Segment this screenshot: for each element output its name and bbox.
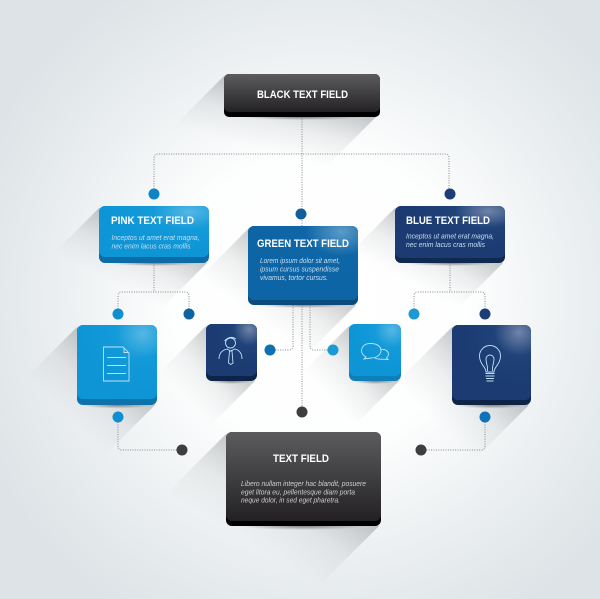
heading: green text field: GREEN TEXT FIELD [257,238,349,250]
body text: green: Lorem ipsum dolor sit amet, [260,258,340,265]
connector dots [112,188,490,456]
heading: pink text field: PINK TEXT FIELD [111,215,194,227]
panel: bottom text field: neque dolor, in sed eget pharetra. [241,498,340,504]
body text: blue: Inceptos ut amet erat magna, [406,234,494,240]
panel: black text field [224,74,380,117]
panel: green text field: ipsum cursus suspendisse [260,266,339,274]
panel: document tile [77,325,157,405]
heading: black text field: BLACK TEXT FIELD [257,89,348,101]
panel: bulb tile [452,325,531,405]
icon: light bulb [480,346,500,381]
body text: pink: Inceptos ut amet erat magna, [112,235,200,242]
heading: text field: TEXT FIELD [273,453,329,465]
panel: green text field [248,226,358,305]
panel: pink text field [99,206,209,263]
long shadows [27,76,529,586]
icon: person with tie [219,337,242,364]
heading: blue text field: BLUE TEXT FIELD [406,215,490,227]
panel: green text field: vivamus, tortor cursus. [260,275,328,282]
panel: bottom text field: eget litora eu, pellentesque diam porta [241,490,355,496]
icon: document [104,347,129,381]
panel: person tile [206,324,257,381]
icon: speech bubbles [362,343,388,360]
panel: pink text field: nec enim lacus cras mollis [112,244,191,250]
panel: bottom text field [226,432,381,526]
body text: bottom: Libero nullam integer hac blandit, posuere [241,481,366,488]
connector lines [118,117,485,450]
panel: chat tile [349,324,401,381]
panel: blue text field [395,206,505,263]
panel: blue text field: nec enim lacus cras mollis [406,242,485,249]
